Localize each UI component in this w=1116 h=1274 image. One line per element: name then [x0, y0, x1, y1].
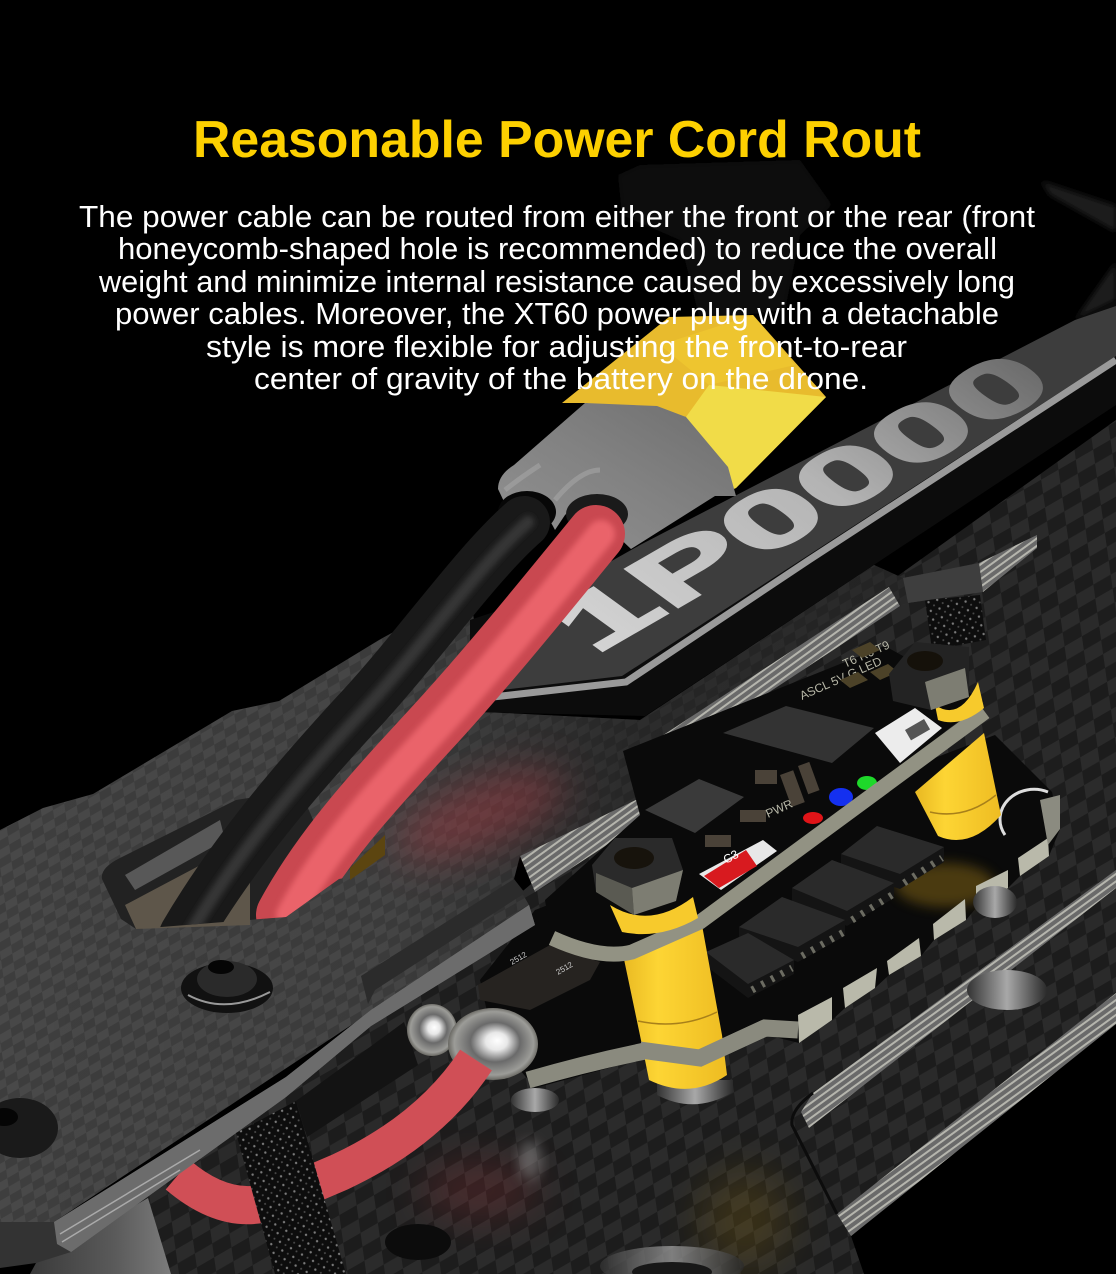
nameplate lettering: 1P0000	[527, 337, 1077, 667]
button head screws	[0, 960, 273, 1158]
right standoff top and nut	[889, 642, 984, 722]
lower red cable	[178, 1060, 476, 1205]
large mcu chip	[723, 706, 874, 763]
red cable	[285, 534, 601, 915]
plate holes	[385, 1224, 451, 1260]
description text: power cables. Moreover, the XT60 power plug with a detachable	[115, 296, 999, 331]
board teeth	[798, 838, 1049, 1043]
lower ESC board	[480, 735, 1060, 1088]
gold reflection	[895, 863, 995, 907]
slot in plate	[361, 879, 525, 1004]
red reflection	[385, 752, 575, 878]
status leds	[803, 812, 823, 824]
yellow shell	[562, 315, 826, 496]
silkscreen labels: T6 R6 T9	[841, 638, 892, 671]
plate edge	[54, 905, 535, 1252]
gold pads	[840, 642, 898, 688]
description text: The power cable can be routed from either the front or the rear (front	[79, 199, 1035, 234]
description text	[79, 199, 1035, 396]
lower black sheath	[296, 1022, 418, 1137]
title: Reasonable Power Cord Rout	[193, 111, 921, 169]
faint background hardware	[618, 160, 1116, 320]
silver corner block	[30, 1198, 171, 1274]
XT60 connector shell	[498, 315, 826, 549]
gyro chip	[645, 779, 744, 833]
description text: center of gravity of the battery on the drone.	[254, 361, 868, 396]
main carbon plate	[0, 535, 1037, 1268]
front plate edge repaint	[54, 905, 535, 1252]
small components	[705, 762, 820, 847]
left lower yellow standoff	[621, 925, 733, 1104]
solder pads and resistors	[478, 945, 600, 1010]
white button	[875, 708, 942, 763]
black cable	[185, 522, 528, 935]
solder joints	[407, 1004, 538, 1080]
silkscreen labels: PWR	[764, 796, 795, 821]
grey boot	[498, 403, 736, 549]
red capacitor: C3	[721, 847, 741, 867]
board edge	[552, 712, 985, 954]
threaded front post	[236, 1101, 346, 1274]
threaded rear standoff	[925, 595, 986, 650]
flight controller board	[545, 638, 985, 954]
silkscreen labels	[764, 638, 892, 821]
pcb	[480, 735, 1060, 1088]
solder pads and resistors: 2512	[508, 950, 529, 967]
esc board edge	[528, 1028, 798, 1080]
silkscreen labels: ASCL 5V G LED	[798, 654, 884, 703]
description text: honeycomb-shaped hole is recommended) to reduce the overall	[118, 231, 997, 266]
esc edge over standoff	[640, 1028, 765, 1058]
main power cables	[185, 522, 601, 935]
left standoff top and nut	[592, 838, 698, 934]
description text: style is more flexible for adjusting the front-to-rear	[206, 329, 907, 364]
cable hole	[102, 790, 385, 929]
slot edge strips	[801, 870, 1116, 1128]
right lower yellow standoff	[915, 733, 1017, 918]
description text: weight and minimize internal resistance caused by excessively long	[98, 264, 1015, 299]
mosfets	[706, 826, 944, 998]
lower carbon plate	[60, 420, 1116, 1274]
red capacitor	[699, 840, 777, 890]
pcb	[545, 646, 984, 950]
front corner	[0, 1222, 71, 1268]
nameplate	[470, 300, 1116, 716]
reflection glows	[700, 1170, 790, 1270]
cable entries	[498, 491, 556, 533]
solder pads and resistors: 2512	[554, 960, 575, 977]
plate edge fine lines	[60, 1150, 200, 1242]
